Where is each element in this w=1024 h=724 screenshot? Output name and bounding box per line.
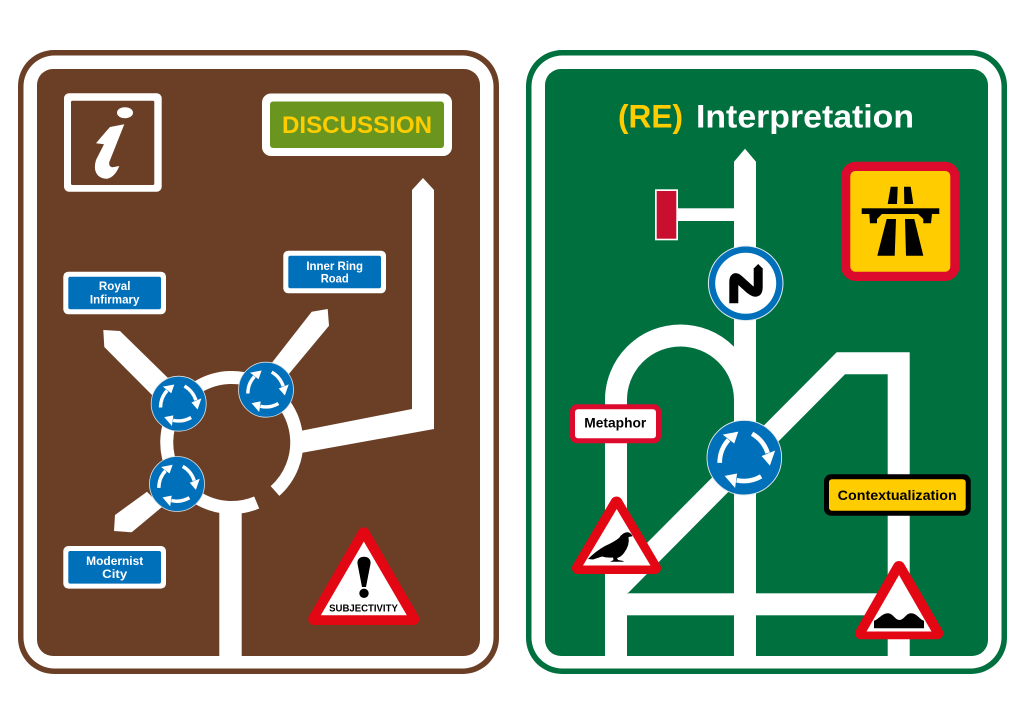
south road bbox=[219, 505, 242, 656]
icon: mini roundabout sign, south-west bbox=[150, 456, 204, 512]
heading: discussion: DISCUSSION bbox=[282, 112, 432, 139]
panel: discussion (brown sign) bbox=[18, 50, 499, 674]
label: contextualization: Contextualization bbox=[838, 488, 957, 503]
icon: motorway sign bbox=[841, 162, 960, 281]
icon: subjectivity warning triangle: SUBJECTIVITY bbox=[329, 603, 398, 614]
label: inner ring road: Road bbox=[321, 273, 349, 285]
icon: bends ahead sign bbox=[708, 245, 784, 321]
icon: information i bbox=[64, 93, 162, 192]
label: contextualization bbox=[824, 474, 971, 516]
label: royal infirmary: Infirmary bbox=[90, 294, 140, 306]
icon: pigeon warning triangle bbox=[578, 502, 655, 568]
road: lower horizontal route bbox=[616, 593, 899, 615]
arrow: road to discussion bbox=[300, 178, 434, 453]
label: metaphor: Metaphor bbox=[584, 416, 647, 431]
label: modernist city: Modernist bbox=[86, 556, 143, 568]
icon: red dead-end bar bbox=[655, 189, 678, 240]
icon: road bumps warning triangle bbox=[861, 567, 937, 633]
roundabout ring road bbox=[167, 377, 297, 507]
arrow: north-west road arm bbox=[103, 330, 168, 395]
road: branch to red no-through sign bbox=[677, 208, 735, 221]
label: inner ring road bbox=[283, 251, 386, 293]
arrow: north-east road arm bbox=[272, 309, 329, 375]
heading: (RE) Interpretation: (RE) bbox=[618, 98, 683, 134]
road: diagonal and right-hand route bbox=[627, 352, 910, 656]
icon: subjectivity warning triangle bbox=[314, 533, 413, 619]
arrow: main vertical road bbox=[734, 149, 756, 656]
label: inner ring road: Inner Ring bbox=[306, 261, 363, 273]
label: modernist city bbox=[63, 546, 166, 589]
icon: central roundabout sign bbox=[707, 420, 782, 495]
arrow: south-west road arm bbox=[114, 492, 162, 532]
heading: discussion bbox=[262, 94, 452, 156]
label: modernist city: City bbox=[102, 569, 128, 581]
label: metaphor bbox=[570, 404, 661, 443]
road: loop from left side into main road bbox=[616, 336, 745, 656]
icon: mini roundabout sign, north-west bbox=[151, 376, 206, 431]
label: royal infirmary bbox=[63, 272, 166, 314]
panel: reinterpretation (green sign) bbox=[526, 50, 1007, 674]
heading: (RE) Interpretation: Interpretation bbox=[696, 98, 914, 134]
label: royal infirmary: Royal bbox=[99, 281, 130, 293]
heading: (RE) Interpretation bbox=[618, 98, 914, 134]
icon: mini roundabout sign, north-east bbox=[238, 362, 294, 417]
